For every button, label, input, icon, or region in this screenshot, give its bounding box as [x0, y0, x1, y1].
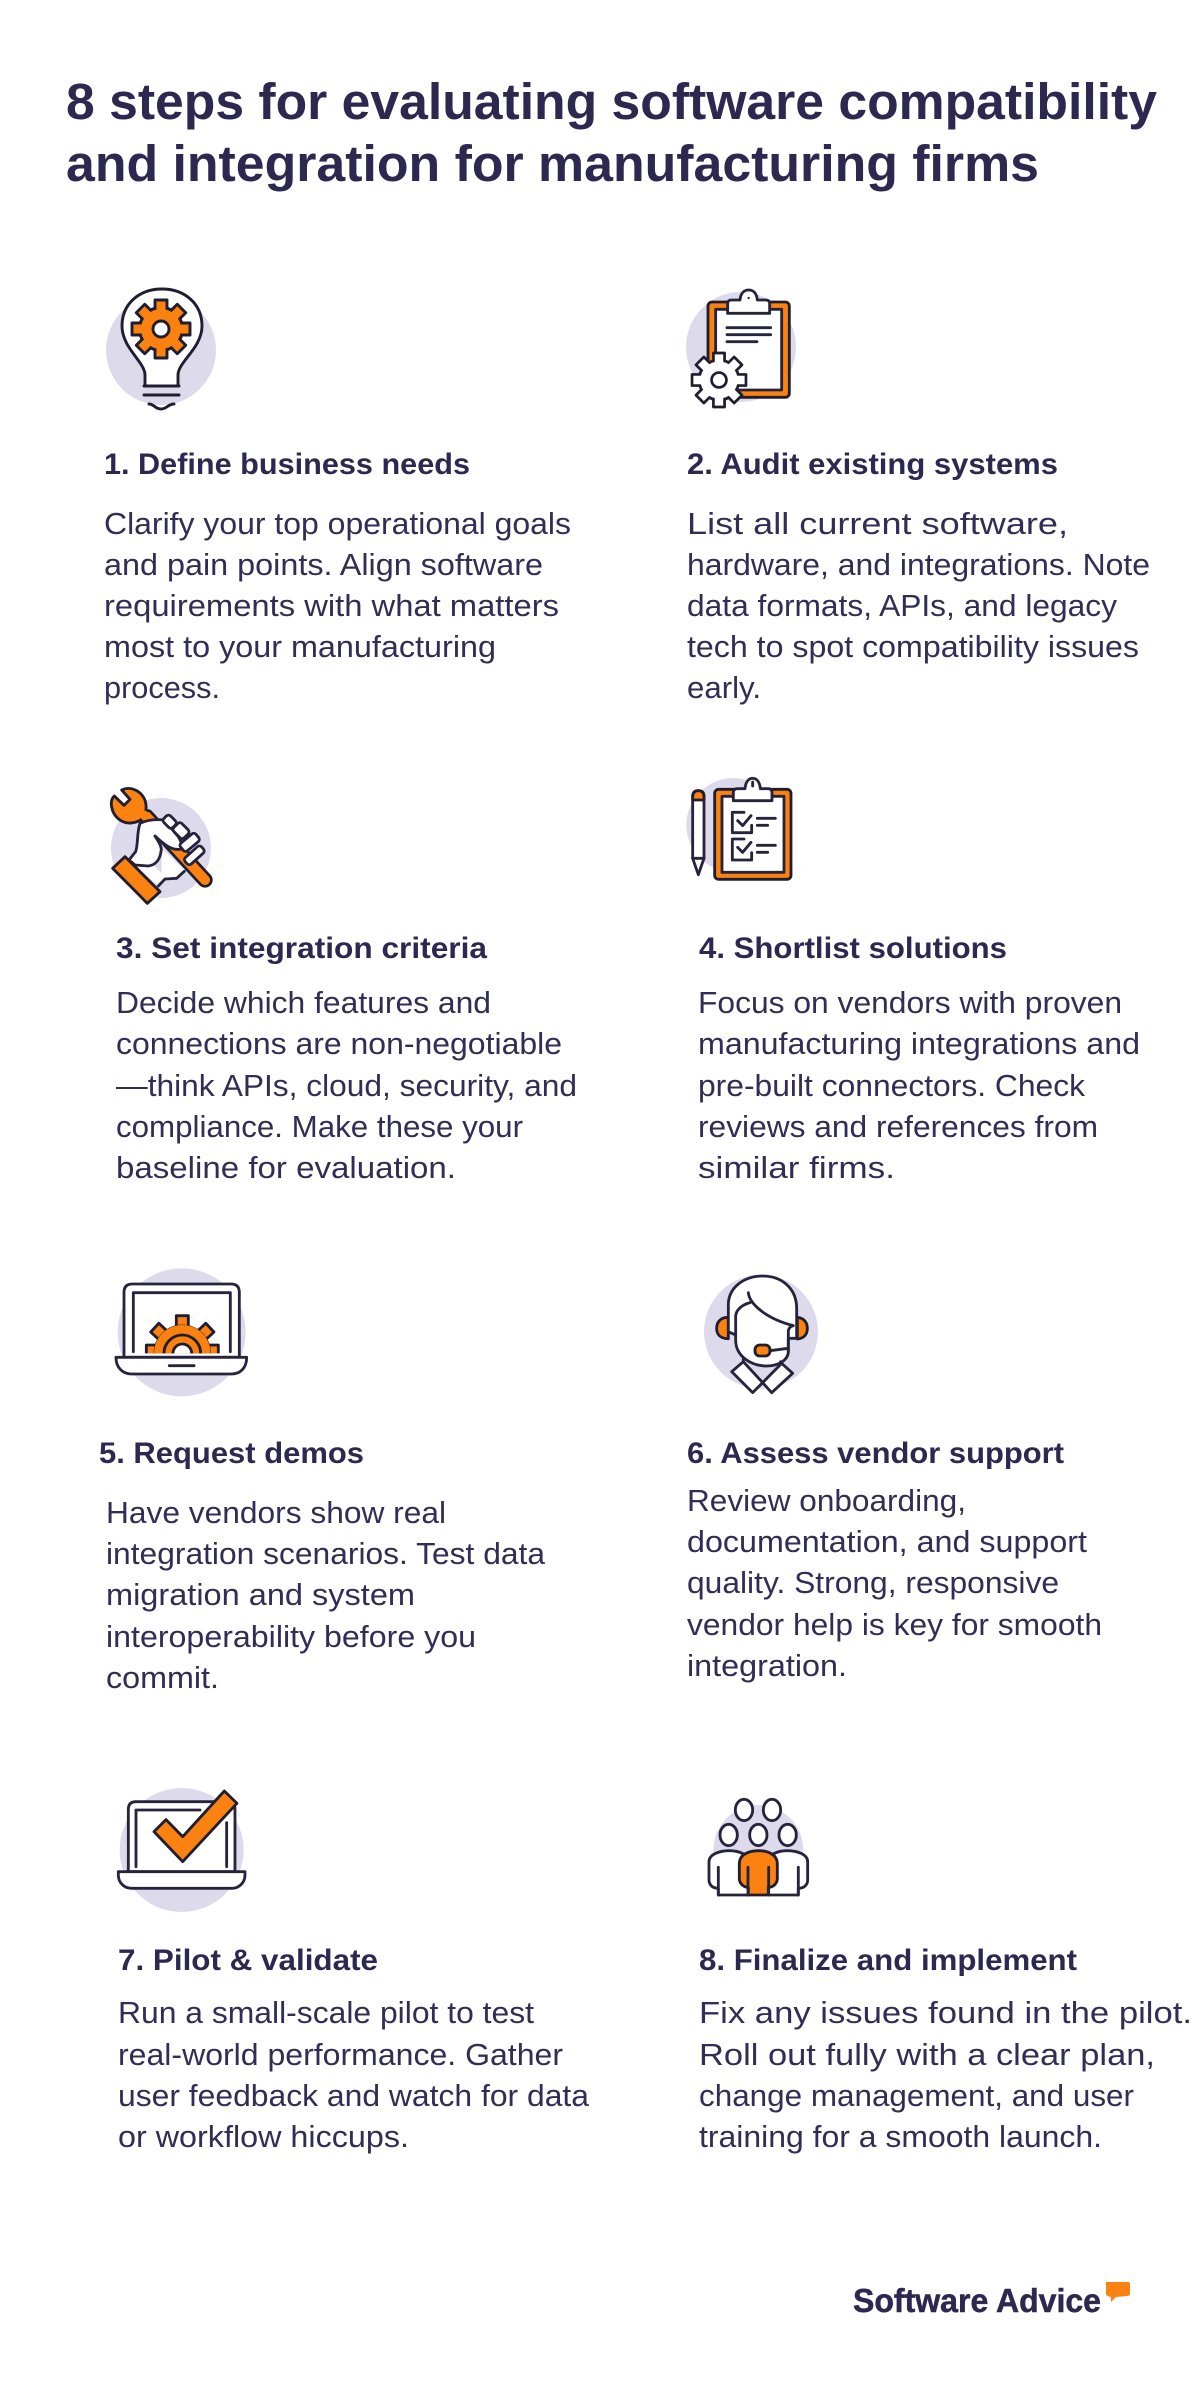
icon: clipboard with gear — [686, 290, 796, 407]
text block: baseline for evaluation. — [116, 1151, 456, 1185]
text block — [687, 1484, 1102, 1683]
text block: similar firms. — [698, 1151, 895, 1185]
icon: laptop with gear — [116, 1268, 247, 1396]
text block: most to your manufacturing — [104, 630, 496, 664]
text block: reviews and references from — [698, 1110, 1098, 1144]
text block: manufacturing integrations and — [698, 1027, 1140, 1061]
heading: 6. Assess vendor support — [687, 1437, 1064, 1470]
text block: migration and system — [106, 1578, 415, 1612]
panel: step 6 assess vendor support — [687, 1275, 1102, 1683]
text block: Fix any issues found in the pilot. — [699, 1996, 1192, 2030]
text block: training for a smooth launch. — [699, 2120, 1102, 2154]
heading: 7. Pilot & validate — [118, 1944, 378, 1977]
heading: 8. Finalize and implement — [699, 1944, 1077, 1977]
text block — [687, 507, 1150, 705]
text block: real-world performance. Gather — [118, 2038, 563, 2072]
title — [66, 73, 1158, 192]
text block — [104, 507, 571, 705]
text block: connections are non-negotiable — [116, 1027, 562, 1061]
text block: List all current software, — [687, 507, 1068, 541]
panel: step 7 pilot and validate — [118, 1788, 589, 2154]
panel: step 8 finalize and implement — [699, 1799, 1192, 2154]
text block: data formats, APIs, and legacy — [687, 589, 1118, 623]
text block: and pain points. Align software — [104, 548, 543, 582]
text block: pre-built connectors. Check — [698, 1069, 1086, 1103]
icon: group of people — [709, 1799, 808, 1895]
text block: Review onboarding, — [687, 1484, 966, 1518]
text block: quality. Strong, responsive — [687, 1566, 1059, 1600]
text block: Have vendors show real — [106, 1496, 446, 1530]
panel: step 1 define business needs — [104, 289, 571, 705]
heading: 2. Audit existing systems — [687, 448, 1058, 481]
text block — [116, 986, 577, 1185]
text block: compliance. Make these your — [116, 1110, 523, 1144]
text block: vendor help is key for smooth — [687, 1608, 1102, 1642]
icon: speech bubble — [1106, 2282, 1130, 2302]
text block: —think APIs, cloud, security, and — [116, 1069, 577, 1103]
text block: tech to spot compatibility issues — [687, 630, 1139, 664]
text block — [699, 1996, 1192, 2154]
icon: hand holding wrench — [111, 788, 211, 903]
icon: light bulb with gear — [106, 289, 216, 409]
text block: user feedback and watch for data — [118, 2079, 589, 2113]
title: 8 steps for evaluating software compatibility — [66, 73, 1158, 130]
heading: 1. Define business needs — [104, 448, 470, 481]
text block: Roll out fully with a clear plan, — [699, 2038, 1155, 2072]
text block: commit. — [106, 1661, 219, 1695]
text block: documentation, and support — [687, 1525, 1088, 1559]
icon: support agent with headset — [704, 1275, 818, 1393]
panel: step 5 request demos — [99, 1268, 545, 1695]
text block: Focus on vendors with proven — [698, 986, 1122, 1020]
text block: change management, and user — [699, 2079, 1134, 2113]
text block: Decide which features and — [116, 986, 491, 1020]
heading: 5. Request demos — [99, 1437, 364, 1470]
text block — [118, 1996, 589, 2154]
panel: step 2 audit existing systems — [686, 290, 1150, 705]
text block: hardware, and integrations. Note — [687, 548, 1150, 582]
text block: integration. — [687, 1649, 847, 1683]
icon: checklist clipboard with pencil — [686, 778, 791, 879]
text block — [698, 986, 1140, 1185]
text block: requirements with what matters — [104, 589, 559, 623]
text block: process. — [104, 671, 220, 705]
logo: Software Advice: Software Advice — [853, 2282, 1101, 2319]
panel: step 3 set integration criteria — [111, 788, 577, 1185]
text block: integration scenarios. Test data — [106, 1537, 545, 1571]
text block: Run a small-scale pilot to test — [118, 1996, 535, 2030]
heading: 3. Set integration criteria — [116, 932, 488, 965]
text block: Clarify your top operational goals — [104, 507, 571, 541]
heading: 4. Shortlist solutions — [699, 932, 1007, 965]
icon: laptop with check mark — [118, 1788, 245, 1912]
text block: or workflow hiccups. — [118, 2120, 409, 2154]
text block — [106, 1496, 545, 1695]
panel: step 4 shortlist solutions — [686, 778, 1140, 1185]
text block: early. — [687, 671, 761, 705]
text block: interoperability before you — [106, 1620, 476, 1654]
title: and integration for manufacturing firms — [66, 135, 1039, 192]
